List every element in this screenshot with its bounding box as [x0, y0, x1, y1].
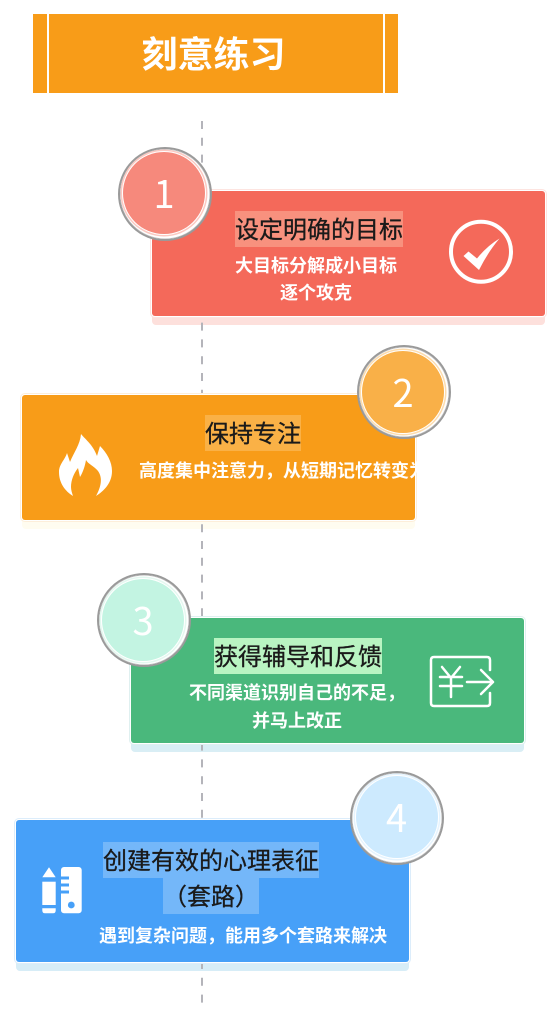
title banner — [33, 14, 398, 93]
step 1 card — [152, 191, 545, 316]
step 1 number badge — [118, 146, 212, 240]
step 1 description: 逐个攻克 — [280, 283, 352, 303]
step 3 number badge — [96, 573, 190, 667]
step 1 description — [235, 256, 397, 303]
step 1 description: 大目标分解成小目标 — [235, 256, 397, 276]
step 2 number badge: 2 — [392, 362, 414, 418]
step 2 card — [22, 395, 415, 520]
panel: step 2 — [20, 345, 499, 529]
panel: step 1 — [118, 147, 547, 325]
step 4 card shadow — [16, 962, 409, 971]
banner right stripe — [383, 14, 385, 93]
icon: check circle — [449, 220, 513, 284]
step 3 number badge: 3 — [132, 590, 154, 646]
step 2 number badge — [356, 345, 450, 439]
step 3 description: 并马上改正 — [252, 711, 342, 731]
step 4 heading line 2: （套路） — [163, 884, 259, 911]
panel: step 3 — [97, 573, 526, 752]
step 3 card shadow — [131, 743, 524, 752]
timeline dashed line — [201, 121, 203, 1003]
step 2 heading: 保持专注 — [205, 421, 301, 448]
step 1 number badge: 1 — [153, 164, 175, 219]
step 4 description: 遇到复杂问题，能用多个套路来解决 — [99, 926, 387, 946]
step 3 card — [131, 618, 524, 743]
panel: step 4 — [14, 771, 444, 971]
step 3 description — [189, 683, 405, 731]
step 4 number badge: 4 — [386, 788, 407, 843]
step 1 heading: 设定明确的目标 — [235, 217, 403, 244]
step 1 card shadow — [152, 316, 545, 325]
title: 刻意练习 — [141, 34, 286, 75]
step 2 description, overflowing the card in white: 高度集中注意力，从短期记忆转变为长期记忆 — [139, 461, 499, 481]
step 4 heading line 1: 创建有效的心理表征 — [103, 848, 319, 875]
step 3 heading: 获得辅导和反馈 — [214, 644, 382, 671]
step 3 description: 不同渠道识别自己的不足， — [189, 683, 405, 703]
icon: pencil and ruler — [42, 867, 82, 914]
step 2 card shadow — [22, 520, 415, 529]
icon: flame — [59, 434, 112, 496]
icon: currency transfer — [430, 656, 494, 708]
step 4 number badge — [350, 770, 444, 864]
step 4 card — [16, 820, 409, 962]
banner left stripe — [47, 14, 49, 93]
